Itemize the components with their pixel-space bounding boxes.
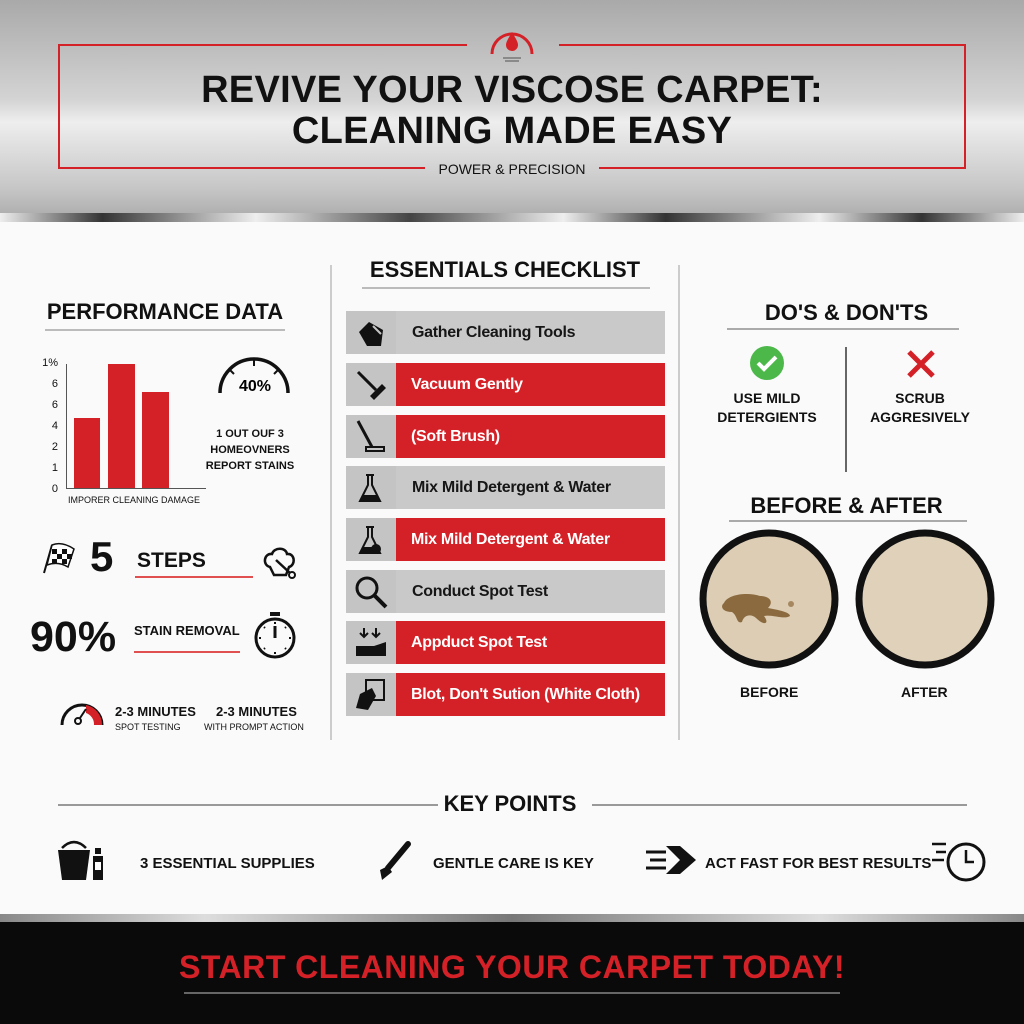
bar chart: 0 <box>52 483 58 495</box>
row 2 <box>346 363 665 406</box>
do text: DETERGIENTS <box>717 409 817 425</box>
row 7: Appduct Spot Test <box>411 634 547 650</box>
title: CLEANING MADE EASY <box>292 110 732 152</box>
row 1 <box>346 311 665 354</box>
panel: key points: 3 ESSENTIAL SUPPLIES <box>140 855 315 872</box>
heading: DO'S & DON'TS <box>765 300 928 325</box>
heading: PERFORMANCE DATA <box>47 299 283 324</box>
dont text: SCRUB <box>895 390 945 406</box>
panel: key points: GENTLE CARE IS KEY <box>433 855 594 872</box>
panel: before and after: AFTER <box>901 684 948 700</box>
panel: performance data: SPOT TESTING <box>115 722 181 732</box>
subtitle: POWER & PRECISION <box>438 161 586 177</box>
title <box>201 69 823 152</box>
row 8: Blot, Don't Sution (White Cloth) <box>411 686 640 702</box>
panel: performance data: STAIN REMOVAL <box>134 623 240 638</box>
do text: USE MILD <box>734 390 800 406</box>
do text <box>717 390 817 425</box>
bar chart: 1% <box>42 357 58 369</box>
bar chart: IMPORER CLEANING DAMAGE <box>68 495 200 505</box>
call to action: START CLEANING YOUR CARPET TODAY! <box>179 949 845 985</box>
row 7 <box>346 621 665 664</box>
bar chart: 6 <box>52 378 58 390</box>
row 6 <box>346 570 665 613</box>
header band <box>0 0 1024 222</box>
panel: before and after: BEFORE <box>740 684 798 700</box>
heading: KEY POINTS <box>444 791 576 816</box>
heading: ESSENTIALS CHECKLIST <box>370 257 640 282</box>
row 6: Conduct Spot Test <box>412 582 548 600</box>
row 3: (Soft Brush) <box>411 428 500 444</box>
before circle <box>700 530 838 668</box>
90% stain removal: 90% <box>30 613 116 661</box>
row 4: Mix Mild Detergent & Water <box>412 478 611 496</box>
row 1: Gather Cleaning Tools <box>412 324 575 340</box>
panel: key points <box>58 791 986 882</box>
bar chart: 2 <box>52 441 58 453</box>
icon: bucket <box>58 840 103 880</box>
row 5 <box>346 518 665 561</box>
dont text <box>870 390 970 425</box>
panel: performance data: WITH PROMPT ACTION <box>204 722 304 732</box>
panel: performance data: 2-3 MINUTES <box>115 704 196 719</box>
bar chart: 6 <box>52 399 58 411</box>
icon: check <box>750 346 784 380</box>
panel: performance data: 2-3 MINUTES <box>216 704 297 719</box>
heading: BEFORE & AFTER <box>750 493 943 518</box>
icon: clock <box>932 842 986 882</box>
5 steps <box>43 533 296 580</box>
after circle <box>856 530 994 668</box>
gauge minutes <box>60 704 104 725</box>
stat text: REPORT STAINS <box>206 460 294 472</box>
panel: key points: ACT FAST FOR BEST RESULTS <box>705 855 931 872</box>
footer band <box>0 914 1024 1024</box>
panel: dos and donts <box>717 300 970 472</box>
row 4 <box>346 466 665 509</box>
icon: gauge drop <box>490 32 534 62</box>
header frame <box>58 44 966 169</box>
row 3 <box>346 415 665 458</box>
bar chart: 4 <box>52 420 58 432</box>
stat text: 1 OUT OUF 3 <box>216 428 284 440</box>
5 steps: STEPS <box>137 549 206 572</box>
stat text: HOMEOVNERS <box>210 444 290 456</box>
icon: cross <box>907 350 935 378</box>
row 2: Vacuum Gently <box>411 376 523 392</box>
icon: stopwatch <box>254 612 296 658</box>
stat text <box>206 428 294 472</box>
bar chart: 1 <box>52 462 58 474</box>
title: REVIVE YOUR VISCOSE CARPET: <box>201 69 823 111</box>
bar chart <box>42 357 206 505</box>
icon: brush <box>380 841 411 880</box>
gauge 40%: 40% <box>239 378 271 395</box>
gauge 40% <box>218 357 290 395</box>
dont text: AGGRESIVELY <box>870 409 970 425</box>
5 steps: 5 <box>90 533 113 580</box>
row 5: Mix Mild Detergent & Water <box>411 530 610 548</box>
row 8 <box>346 673 665 716</box>
icon: speed arrow <box>646 846 696 874</box>
panel: before and after <box>700 493 994 700</box>
panel: performance data <box>30 299 304 732</box>
